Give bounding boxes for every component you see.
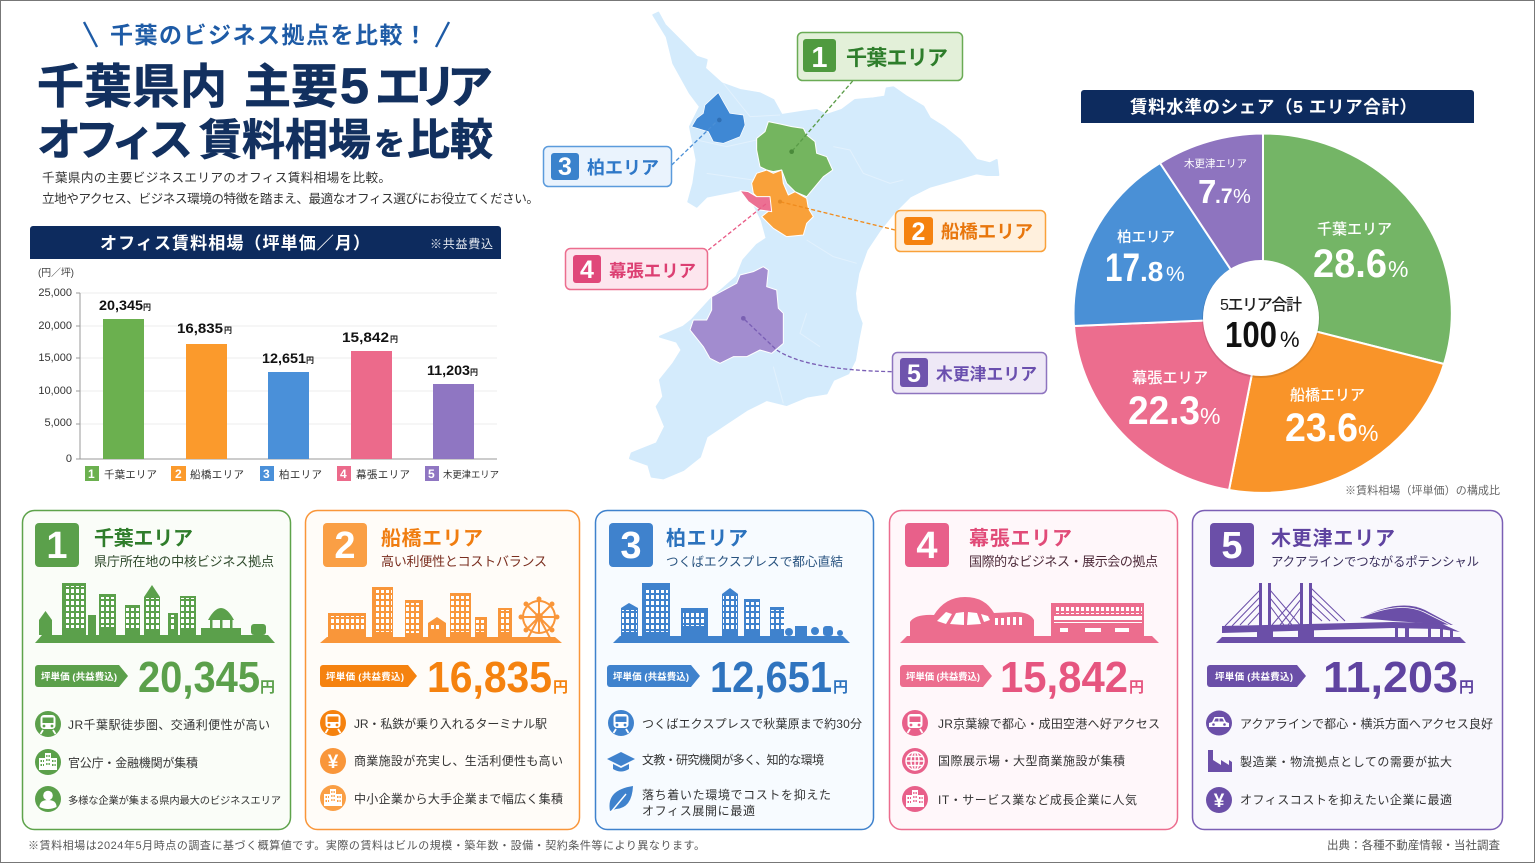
skyline bbox=[613, 583, 850, 643]
number badge: 4 bbox=[916, 525, 938, 567]
price: 16,835 bbox=[427, 653, 552, 702]
pie labels: % bbox=[1200, 403, 1220, 429]
feature list: 多様な企業が集まる県内最大のビジネスエリア bbox=[68, 794, 281, 807]
chart legend: 木更津エリア bbox=[443, 469, 499, 480]
map label 2: 2 bbox=[912, 218, 925, 246]
pie center: % bbox=[1280, 327, 1300, 352]
map anchor dots bbox=[717, 118, 794, 321]
price: 円 bbox=[1129, 679, 1144, 696]
chart heading bbox=[30, 226, 501, 259]
map label 4 bbox=[566, 248, 708, 290]
chart legend bbox=[85, 466, 499, 481]
title bbox=[37, 58, 493, 165]
card title: 柏エリア bbox=[666, 527, 748, 550]
skyline bbox=[320, 587, 562, 643]
price: 円 bbox=[833, 679, 848, 696]
area: Kisarazu bbox=[690, 267, 783, 363]
panel: card 3 Kashiwa bbox=[596, 510, 874, 830]
map label 2: 船橋エリア bbox=[941, 221, 1033, 242]
panel: card 5 Kisarazu bbox=[1192, 510, 1502, 830]
y axis: 5,000 bbox=[44, 417, 72, 429]
card subtitle: つくばエクスプレスで都心直結 bbox=[666, 554, 843, 569]
panel: card 2 Funabashi bbox=[306, 510, 580, 830]
bar values: 20,345 bbox=[99, 297, 143, 313]
feature list: ¥ bbox=[1214, 791, 1225, 812]
skyline: bridge bbox=[1216, 583, 1466, 643]
intro text bbox=[42, 171, 539, 206]
chart heading: オフィス賃料相場（坪単価／月） bbox=[100, 234, 370, 253]
card title: 千葉エリア bbox=[94, 527, 193, 550]
pie labels: 28.6 bbox=[1313, 242, 1387, 286]
chart legend: 船橋エリア bbox=[190, 468, 244, 481]
feature list: JR・私鉄が乗り入れるターミナル駅 bbox=[354, 716, 547, 731]
pie center: 5エリア合計 bbox=[1220, 296, 1302, 314]
number badge bbox=[323, 523, 367, 567]
chart legend: 柏エリア bbox=[279, 468, 322, 481]
pie labels: 7 bbox=[1198, 173, 1216, 210]
pie center: 100 bbox=[1225, 314, 1277, 355]
feature list: 文教・研究機関が多く、知的な環境 bbox=[642, 752, 824, 767]
pie center bbox=[1202, 260, 1320, 378]
price tag bbox=[35, 665, 128, 687]
feature list: アクアラインで都心・横浜方面へアクセス良好 bbox=[1240, 716, 1493, 731]
pie labels: 木更津エリア bbox=[1184, 158, 1247, 170]
number badge: 5 bbox=[1221, 525, 1243, 567]
feature list: 官公庁・金融機関が集積 bbox=[68, 755, 198, 770]
intro text: 立地やアクセス、ビジネス環境の特徴を踏まえ、最適なオフィス選びにお役立てください。 bbox=[42, 192, 539, 206]
intro text: 千葉県内の主要ビジネスエリアのオフィス賃料相場を比較。 bbox=[42, 171, 391, 185]
map label 5: 5 bbox=[907, 360, 921, 388]
title: 主要 bbox=[244, 60, 338, 113]
number badge: 2 bbox=[334, 525, 356, 567]
panel: card 1 Chiba bbox=[22, 510, 290, 830]
card subtitle: 高い利便性とコストバランス bbox=[381, 554, 547, 569]
pie labels: .7 bbox=[1215, 185, 1233, 208]
pie labels bbox=[1105, 158, 1408, 450]
pie slices bbox=[1074, 134, 1452, 493]
map label 1: 千葉エリア bbox=[846, 47, 948, 70]
feature list bbox=[902, 710, 1160, 812]
feature list: IT・サービス業など成長企業に人気 bbox=[938, 792, 1137, 807]
pie heading: 賃料水準のシェア（5 エリア合計） bbox=[1130, 97, 1417, 117]
card subtitle: アクアラインでつながるポテンシャル bbox=[1271, 554, 1479, 569]
y axis: 0 bbox=[66, 453, 72, 465]
pie labels: 柏エリア bbox=[1117, 229, 1175, 246]
price tag bbox=[607, 665, 700, 687]
price tag bbox=[1207, 665, 1306, 687]
pie labels: % bbox=[1233, 186, 1251, 208]
footnote: ※賃料相場は2024年5月時点の調査に基づく概算値です。実際の賃料はビルの規模・築年数・設備・契約条件等により異なります。 bbox=[28, 838, 705, 852]
pie labels: 23.6 bbox=[1285, 406, 1358, 450]
pie labels: 千葉エリア bbox=[1317, 221, 1392, 238]
title: 5 bbox=[340, 58, 369, 114]
skyline bbox=[35, 583, 275, 643]
feature list: 製造業・物流拠点としての需要が拡大 bbox=[1240, 754, 1452, 769]
price tag: 坪単価 (共益費込) bbox=[1215, 671, 1293, 683]
bars bbox=[103, 319, 474, 459]
title: 賃料相場 bbox=[199, 117, 371, 165]
feature list: 中小企業から大手企業まで幅広く集積 bbox=[354, 791, 563, 806]
pie labels: 22.3 bbox=[1128, 389, 1200, 433]
area: Funabashi bbox=[752, 170, 813, 237]
pie note: ※賃料相場（坪単価）の構成比 bbox=[1345, 483, 1500, 497]
bar values: 11,203 bbox=[427, 362, 470, 378]
y axis unit: (円／坪) bbox=[38, 266, 74, 279]
price tag: 坪単価 (共益費込) bbox=[326, 671, 404, 683]
chart legend: 3 bbox=[263, 467, 270, 481]
price: 12,651 bbox=[710, 653, 832, 702]
feature list: 落ち着いた環境でコストを抑えた bbox=[642, 787, 831, 802]
card subtitle: 県庁所在地の中核ビジネス拠点 bbox=[94, 554, 274, 569]
chart legend: 2 bbox=[175, 467, 182, 481]
pie labels: .8 bbox=[1140, 256, 1163, 287]
price: 円 bbox=[1459, 679, 1474, 696]
title: エリア bbox=[375, 61, 493, 113]
feature list: 商業施設が充実し、生活利便性も高い bbox=[354, 753, 563, 768]
number badge bbox=[905, 523, 949, 567]
map label 1 bbox=[798, 32, 962, 80]
bar values: 円 bbox=[306, 356, 314, 365]
feature list: オフィスコストを抑えたい企業に最適 bbox=[1240, 793, 1452, 807]
price: 20,345 bbox=[138, 653, 260, 702]
feature list: JR京葉線で都心・成田空港へ好アクセス bbox=[938, 716, 1160, 731]
pie labels: % bbox=[1388, 256, 1408, 282]
feature list bbox=[607, 710, 862, 818]
y axis: 10,000 bbox=[38, 385, 72, 397]
chart legend: 千葉エリア bbox=[104, 468, 157, 481]
price tag: 坪単価 (共益費込) bbox=[41, 671, 117, 683]
bar values: 円 bbox=[470, 368, 478, 377]
feature list bbox=[1206, 710, 1493, 813]
feature list: JR千葉駅徒歩圏、交通利便性が高い bbox=[68, 717, 270, 732]
panel: card 4 Makuhari bbox=[890, 510, 1178, 830]
chart legend: 4 bbox=[340, 467, 347, 481]
chart legend: 幕張エリア bbox=[356, 468, 410, 481]
map label 2 bbox=[896, 210, 1046, 252]
card title: 木更津エリア bbox=[1271, 527, 1395, 550]
map label 5: 木更津エリア bbox=[936, 365, 1037, 384]
price tag: 坪単価 (共益費込) bbox=[906, 671, 980, 683]
feature list bbox=[35, 711, 281, 812]
y axis: 25,000 bbox=[38, 287, 72, 299]
tagline: 千葉のビジネス拠点を比較！ bbox=[110, 22, 427, 48]
area: Chiba bbox=[757, 122, 833, 197]
map label 4: 4 bbox=[580, 256, 594, 284]
price tag bbox=[900, 665, 992, 687]
feature list: ¥ bbox=[328, 752, 339, 773]
price: 円 bbox=[553, 679, 568, 696]
pie labels: 幕張エリア bbox=[1132, 370, 1208, 387]
map base bbox=[630, 13, 998, 478]
area: Makuhari bbox=[740, 191, 772, 212]
source: 出典：各種不動産情報・当社調査 bbox=[1327, 838, 1500, 852]
pie labels: 船橋エリア bbox=[1290, 387, 1365, 404]
chart legend: 1 bbox=[88, 467, 95, 481]
map label 5 bbox=[892, 352, 1046, 394]
bar values: 円 bbox=[143, 303, 151, 312]
feature list: つくばエクスプレスで秋葉原まで約30分 bbox=[642, 716, 862, 731]
title: を bbox=[374, 127, 405, 162]
card subtitle: 国際的なビジネス・展示会の拠点 bbox=[969, 554, 1158, 569]
feature list: オフィス展開に最適 bbox=[642, 804, 755, 818]
pie labels: % bbox=[1166, 263, 1185, 286]
map label 1: 1 bbox=[811, 42, 828, 74]
title: 千葉県内 bbox=[37, 60, 227, 113]
pie heading bbox=[1081, 90, 1474, 123]
chart heading: ※共益費込 bbox=[430, 236, 493, 251]
title: オフィス bbox=[37, 116, 193, 165]
panel: pie chart bbox=[1074, 90, 1500, 497]
card title: 幕張エリア bbox=[969, 527, 1072, 550]
area: Kashiwa bbox=[692, 93, 745, 143]
number badge: 3 bbox=[620, 525, 642, 567]
bar values bbox=[99, 297, 478, 378]
map label 3: 柏エリア bbox=[587, 158, 659, 178]
card title: 船橋エリア bbox=[381, 527, 483, 550]
chart legend: 5 bbox=[428, 467, 435, 481]
number badge bbox=[1210, 523, 1254, 567]
y axis: 20,000 bbox=[38, 320, 72, 332]
connector lines bbox=[672, 81, 895, 372]
panel: bar chart bbox=[30, 226, 501, 481]
price tag: 坪単価 (共益費込) bbox=[613, 671, 689, 683]
bar values: 円 bbox=[224, 326, 232, 335]
bar values: 円 bbox=[390, 335, 398, 344]
number badge: 1 bbox=[46, 525, 68, 567]
number badge bbox=[609, 523, 653, 567]
skyline bbox=[900, 597, 1159, 643]
pie labels: % bbox=[1358, 420, 1378, 446]
map label 4: 幕張エリア bbox=[609, 261, 696, 281]
bar values: 12,651 bbox=[262, 350, 306, 366]
y axis: 15,000 bbox=[38, 352, 72, 364]
map label 3 bbox=[544, 146, 672, 186]
title: 比較 bbox=[407, 117, 493, 165]
pie labels: 17 bbox=[1105, 246, 1140, 290]
y axis bbox=[38, 287, 497, 465]
price: 15,842 bbox=[1000, 653, 1128, 702]
map label 3: 3 bbox=[558, 153, 572, 181]
feature list: 国際展示場・大型商業施設が集積 bbox=[938, 753, 1125, 768]
price: 11,203 bbox=[1323, 653, 1458, 702]
bar values: 15,842 bbox=[342, 329, 389, 345]
price: 円 bbox=[260, 679, 275, 696]
number badge bbox=[35, 523, 79, 567]
bar values: 16,835 bbox=[177, 320, 223, 336]
feature list bbox=[320, 710, 563, 811]
price tag bbox=[320, 665, 417, 687]
map: Chiba prefecture bbox=[630, 13, 998, 478]
